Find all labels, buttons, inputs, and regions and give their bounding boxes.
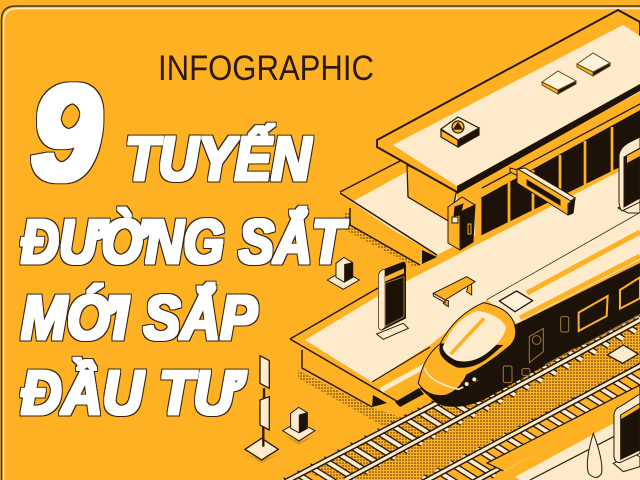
- front platform: [487, 385, 640, 480]
- right platform sign: [618, 137, 640, 213]
- train windows: [579, 277, 640, 331]
- fascia: [457, 92, 640, 242]
- signal base: [245, 438, 278, 460]
- station roof: [377, 10, 640, 194]
- track 2 sleepers: [423, 365, 640, 480]
- hanging station sign: [510, 168, 575, 215]
- signal post: [245, 356, 278, 460]
- signal base hatch: [245, 453, 279, 463]
- title line 3: MỚI SẮP: [21, 284, 258, 353]
- label: infographic: INFOGRAPHIC: [158, 49, 374, 88]
- windshield stripe: [451, 318, 484, 354]
- signal panel upper: [260, 356, 269, 388]
- bench: [433, 277, 475, 307]
- side wall: [407, 165, 457, 222]
- train nose: [418, 303, 516, 396]
- station building glass wall: [407, 92, 640, 242]
- train body: [420, 263, 640, 407]
- roof vent box: [441, 117, 479, 147]
- title line 4: ĐẦU TƯ: [21, 359, 247, 428]
- back platform: [340, 60, 640, 268]
- small ground plate: [607, 345, 638, 363]
- hatch under platform: [298, 370, 445, 426]
- train door details: [503, 315, 640, 383]
- tree cone: [587, 433, 602, 477]
- roof hatch 2: [577, 53, 610, 76]
- ticket kiosk: [448, 197, 475, 250]
- train roof: [487, 213, 640, 323]
- bollard upper: [327, 257, 359, 289]
- signal panel lower: [260, 397, 269, 430]
- nose headlight band: [425, 368, 478, 389]
- track ballast hatch: [305, 295, 640, 480]
- track 1 sleepers: [282, 298, 640, 480]
- platform shadow: [372, 388, 424, 407]
- platform sign: [377, 262, 408, 339]
- railway tracks: [282, 295, 640, 480]
- track 2 rails: [420, 366, 640, 480]
- bollard lower: [283, 407, 315, 445]
- track 1 rails: [285, 297, 640, 480]
- roof hatch 1: [542, 71, 576, 94]
- title line 2: ĐƯỜNG SẮT: [21, 208, 348, 277]
- roof stripes: [520, 232, 640, 318]
- windshield: [443, 311, 506, 361]
- roof panel: [499, 291, 533, 312]
- number 9: 9: [31, 59, 101, 208]
- title line 1: TUYẾN: [125, 125, 312, 194]
- train: [377, 213, 640, 477]
- title: [21, 59, 348, 428]
- right front sign: [613, 394, 640, 472]
- left street furniture: [245, 257, 359, 463]
- platform hatch shadow: [345, 212, 420, 268]
- windshield shadow: [439, 343, 503, 368]
- headlights: [461, 375, 479, 388]
- platform edge stripes: [381, 366, 425, 390]
- main platform: [290, 155, 640, 426]
- shadow wedge: [422, 250, 437, 264]
